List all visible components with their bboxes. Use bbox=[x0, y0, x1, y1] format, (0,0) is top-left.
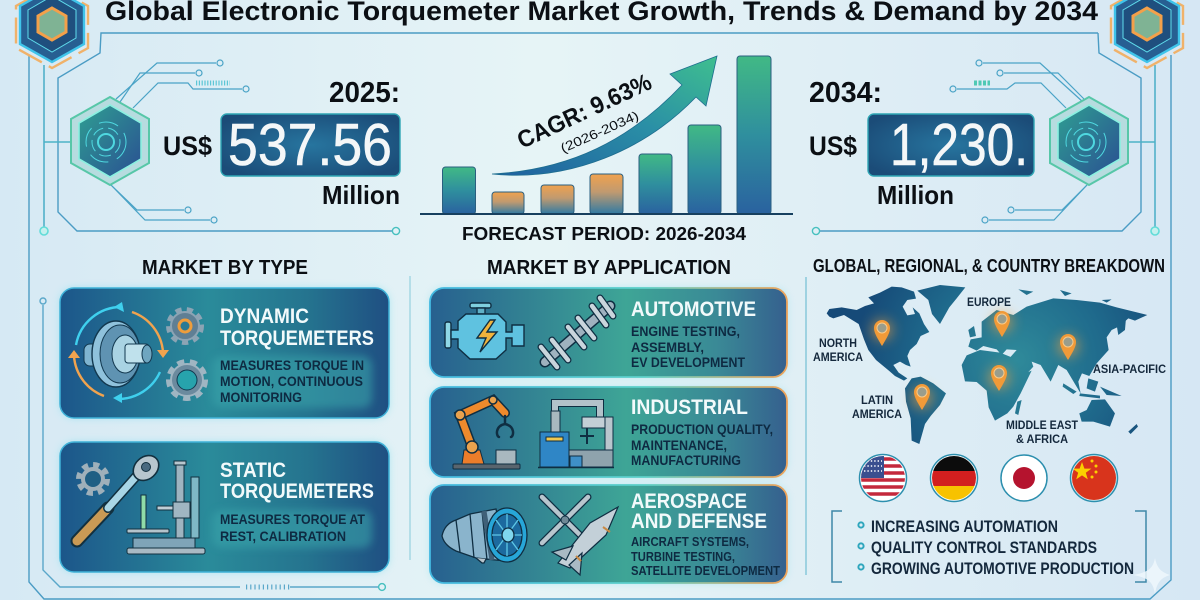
map labels: ASIA-PACIFIC bbox=[1093, 362, 1166, 376]
icon: turbine engine bbox=[442, 508, 527, 563]
flag: Japan bbox=[1001, 455, 1047, 501]
panel: aerospace and defense: SATELLITE DEVELOPMENT bbox=[631, 563, 780, 578]
heading: market by application: MARKET BY APPLICATION bbox=[487, 257, 731, 279]
panel: dynamic torquemeters: MOTION, CONTINUOUS bbox=[220, 373, 363, 389]
panel: automotive: ENGINE TESTING, bbox=[631, 323, 740, 339]
icon: gear bbox=[79, 465, 107, 493]
panel: industrial: MAINTENANCE, bbox=[631, 437, 727, 453]
map pins bbox=[871, 311, 1079, 410]
panel: dynamic torquemeters: MONITORING bbox=[220, 389, 302, 405]
panel: industrial: INDUSTRIAL bbox=[631, 396, 748, 419]
2025 value bbox=[163, 77, 400, 210]
map labels: MIDDLE EAST bbox=[1006, 418, 1079, 432]
icon: gear teal bbox=[169, 362, 205, 398]
map labels: LATIN bbox=[861, 393, 893, 407]
arrow: growth bbox=[492, 56, 717, 175]
panel: aerospace and defense: AEROSPACE bbox=[631, 490, 747, 513]
drivers list: GROWING AUTOMOTIVE PRODUCTION bbox=[871, 559, 1134, 578]
panel: industrial: MANUFACTURING bbox=[631, 452, 741, 468]
map labels bbox=[813, 295, 1166, 446]
2025 display: 537.56 bbox=[228, 112, 392, 178]
drivers list: QUALITY CONTROL STANDARDS bbox=[871, 538, 1097, 557]
2034 value bbox=[809, 77, 1034, 210]
panel: dynamic torquemeters: MEASURES TORQUE IN bbox=[220, 357, 364, 373]
panel: static torquemeters: REST, CALIBRATION bbox=[220, 528, 346, 544]
heading: market by type: MARKET BY TYPE bbox=[142, 257, 308, 279]
icon: top right hexagon badge bbox=[1111, 0, 1183, 68]
drivers list bbox=[832, 511, 1146, 582]
flag: China bbox=[1070, 454, 1118, 502]
CAGR label: (2026-2034) bbox=[558, 108, 641, 156]
icon: left circuit hexagon bbox=[71, 60, 249, 223]
2034 value: Million bbox=[877, 180, 954, 210]
forecast period: FORECAST PERIOD: 2026-2034 bbox=[462, 224, 746, 244]
panel: automotive: EV DEVELOPMENT bbox=[631, 354, 745, 370]
flag: Germany bbox=[930, 454, 978, 502]
panel: static torquemeters: STATIC bbox=[220, 459, 286, 482]
icon: engine bbox=[445, 303, 524, 359]
panel: dynamic torquemeters: TORQUEMETERS bbox=[220, 327, 374, 350]
icon: gear orange bbox=[169, 310, 201, 342]
icon: crankshaft bbox=[541, 298, 613, 367]
flag: USA bbox=[860, 454, 906, 502]
panel: static torquemeters: MEASURES TORQUE AT bbox=[220, 511, 365, 527]
icon: propeller bbox=[542, 497, 588, 543]
CAGR label: CAGR: 9.63% bbox=[513, 69, 656, 154]
panel: aerospace and defense bbox=[430, 485, 787, 583]
world map bbox=[813, 285, 1166, 446]
icon: robot arm bbox=[453, 396, 520, 469]
panel: static torquemeters bbox=[60, 442, 389, 572]
icon: missile bbox=[552, 507, 618, 575]
2034 display: 1,230. bbox=[890, 112, 1028, 178]
icon: sparkle bbox=[1133, 558, 1170, 594]
bar chart bbox=[420, 56, 793, 214]
panel: automotive: AUTOMOTIVE bbox=[631, 298, 756, 321]
panel: aerospace and defense: TURBINE TESTING, bbox=[631, 549, 735, 564]
panel: industrial bbox=[430, 387, 787, 477]
panel: aerospace and defense: AIRCRAFT SYSTEMS, bbox=[631, 534, 749, 549]
panel: dynamic torquemeters bbox=[60, 288, 389, 418]
icon: rotating shaft bbox=[68, 302, 169, 403]
panel: automotive bbox=[430, 288, 787, 377]
2034 value: US$ bbox=[809, 131, 857, 161]
panel: automotive: ASSEMBLY, bbox=[631, 339, 704, 355]
icon: torque wrench bbox=[77, 450, 164, 541]
panel: aerospace and defense: AND DEFENSE bbox=[631, 510, 767, 533]
2025 value: 2025: bbox=[329, 77, 400, 109]
drivers list: INCREASING AUTOMATION bbox=[871, 517, 1058, 536]
2025 value: US$ bbox=[163, 131, 212, 161]
2034 value: 2034: bbox=[809, 77, 882, 109]
icon: factory machine bbox=[538, 403, 614, 468]
map labels: NORTH bbox=[819, 336, 857, 350]
panel: dynamic torquemeters: DYNAMIC bbox=[220, 305, 309, 328]
2025 value: Million bbox=[322, 180, 400, 210]
panel: industrial: PRODUCTION QUALITY, bbox=[631, 421, 773, 437]
icon: test stand bbox=[127, 461, 205, 554]
map labels: & AFRICA bbox=[1016, 432, 1068, 446]
map labels: AMERICA bbox=[813, 350, 863, 364]
map labels: EUROPE bbox=[967, 295, 1011, 309]
map labels: AMERICA bbox=[852, 407, 902, 421]
icon: top left hexagon badge bbox=[16, 0, 88, 68]
panel: static torquemeters: TORQUEMETERS bbox=[220, 480, 374, 503]
icon: right circuit hexagon bbox=[950, 60, 1128, 223]
